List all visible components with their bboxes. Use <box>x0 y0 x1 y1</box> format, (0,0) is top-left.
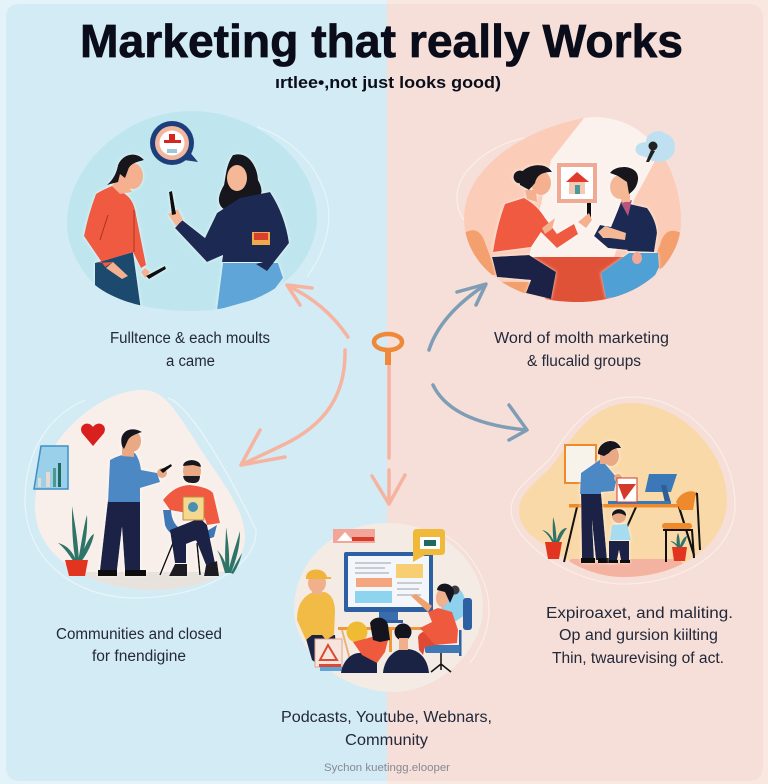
arrow: to top-left scene <box>287 285 348 337</box>
scene: webinar group around monitor (bottom centre) <box>294 523 489 692</box>
chairs <box>464 230 497 275</box>
caption: top right: Word of molth marketing <box>494 330 669 347</box>
monitor <box>608 474 677 504</box>
caption: bottom centre: Community <box>345 732 428 749</box>
caption: top right: & flucalid groups <box>527 353 641 370</box>
framed picture <box>565 445 596 483</box>
desk <box>564 504 694 562</box>
footer credit: Sychon kuetingg.elooper <box>324 762 450 774</box>
caption: bottom centre: Podcasts, Youtube, Webnars, <box>281 709 492 726</box>
caption: left <box>56 626 222 665</box>
scene: two people seated talking (top right) <box>457 116 681 310</box>
boy from behind <box>383 624 429 673</box>
monitor <box>344 552 433 623</box>
arrow: to right scene <box>433 385 527 440</box>
light beam <box>530 117 654 257</box>
plant and pot right <box>670 533 687 561</box>
flag banner <box>333 529 375 543</box>
heart icon <box>81 424 105 446</box>
desk <box>338 627 430 660</box>
arrow: to top-right scene <box>429 284 486 350</box>
caption: right: Expiroaxet, and maliting. <box>546 605 733 622</box>
chart poster <box>34 446 68 489</box>
chat bubble icon <box>413 529 445 562</box>
blob background <box>464 117 681 302</box>
house sign <box>587 203 591 218</box>
man with cap <box>297 570 337 667</box>
picture board <box>315 639 350 671</box>
central pin icon <box>374 334 402 365</box>
document <box>617 478 637 502</box>
caption: top left: Fulltence & each moults <box>110 330 270 347</box>
standing man in blue <box>98 429 172 576</box>
microphone cloud icon <box>635 131 675 162</box>
caption: right <box>546 605 733 667</box>
scene: two people with phones (top left) <box>67 111 329 311</box>
girl in red <box>341 618 390 673</box>
scene: desk worker with child (right) <box>511 397 735 584</box>
title: Marketing that really Works <box>80 15 683 67</box>
subtitle: ırtlee•,not just looks good) <box>275 73 501 92</box>
yellow fan <box>346 622 368 642</box>
woman with sign <box>492 165 595 299</box>
woman in navy sweater <box>168 154 289 310</box>
scene: community, standing and seated men (left) <box>25 390 256 598</box>
caption: bottom centre <box>281 709 492 749</box>
plant and pot left <box>542 517 567 559</box>
chair <box>662 491 700 562</box>
floor <box>532 257 639 302</box>
caption: top left: a came <box>166 353 215 370</box>
caption: right: Thin, twaurevising of act. <box>552 650 724 667</box>
speech bubble icon <box>150 121 198 165</box>
plant left <box>58 506 94 576</box>
caption: left: for fnendigine <box>92 648 186 665</box>
caption: left: Communities and closed <box>56 626 222 643</box>
seated man with tablet <box>160 460 220 576</box>
standing man <box>580 441 622 563</box>
blob background <box>35 390 245 590</box>
arrow: down to bottom scene <box>372 358 405 504</box>
blob background <box>519 403 727 577</box>
man in navy jacket <box>594 167 659 298</box>
blob background <box>67 111 317 311</box>
woman at right on chair <box>411 584 472 672</box>
caption: right: Op and gursion kiilting <box>559 627 718 644</box>
blob background <box>294 523 483 692</box>
arrow: to left scene <box>241 350 345 465</box>
child <box>609 509 631 563</box>
caption: top right <box>494 330 669 370</box>
man in red sweater <box>84 155 166 310</box>
plant right <box>217 527 242 574</box>
caption: top left <box>110 330 270 370</box>
